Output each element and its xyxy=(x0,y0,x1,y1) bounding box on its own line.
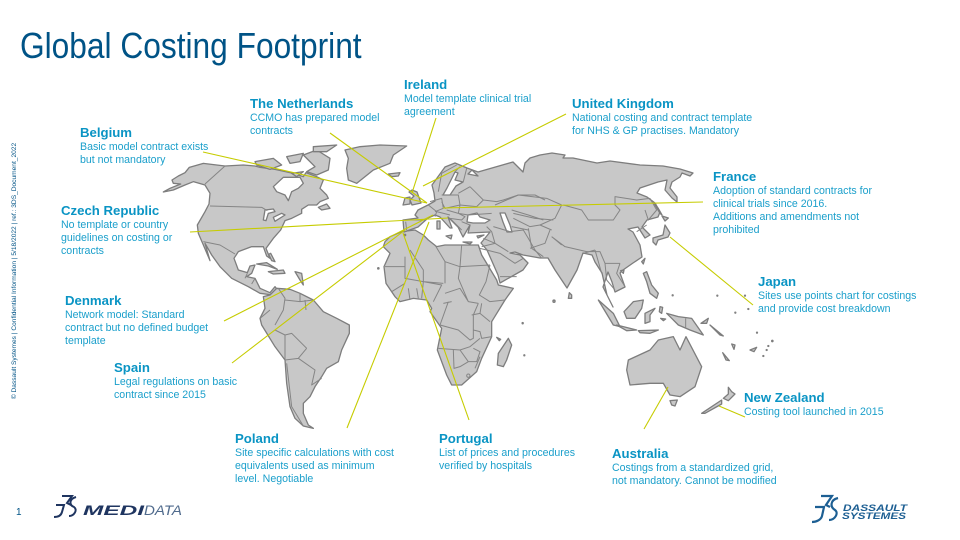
map: Europe and Asia borders xyxy=(406,165,657,290)
icon: 3DS mark xyxy=(812,496,838,522)
label: Spain: Legal regulations on basic xyxy=(114,376,237,388)
label: Spain: Spain xyxy=(114,360,150,375)
label: Portugal: List of prices and procedures xyxy=(439,447,575,459)
label: The Netherlands xyxy=(250,96,380,137)
map: North America and Greenland xyxy=(163,145,407,295)
label: Denmark: contract but no defined budget xyxy=(65,322,208,334)
leader: Japan xyxy=(670,237,753,305)
label: Australia: not mandatory. Cannot be modified xyxy=(612,475,777,487)
label: Denmark: Network model: Standard xyxy=(65,309,185,321)
label: United Kingdom: United Kingdom xyxy=(572,96,674,111)
label: Belgium xyxy=(80,125,208,166)
label: Denmark: Denmark xyxy=(65,293,121,308)
label: The Netherlands: CCMO has prepared model xyxy=(250,112,380,124)
label: Poland: equivalents used as minimum xyxy=(235,460,375,472)
leader: Poland xyxy=(347,222,429,428)
label: France: Adoption of standard contracts for xyxy=(713,185,872,197)
label: Denmark: template xyxy=(65,335,106,347)
leader: Portugal xyxy=(403,233,469,420)
label: Portugal: Portugal xyxy=(439,431,492,446)
label: Spain: contract since 2015 xyxy=(114,389,206,401)
label: Japan: Sites use points chart for costings xyxy=(758,290,916,302)
leader: The Netherlands xyxy=(330,133,427,203)
leader: Belgium xyxy=(203,152,427,203)
map: inland seas xyxy=(443,170,512,232)
logo: Dassault Systemes: SYSTEMES xyxy=(842,511,906,521)
leader: Ireland xyxy=(412,118,436,193)
label: France xyxy=(713,169,872,236)
label: Australia xyxy=(612,446,777,487)
map: East and Southeast Asia islands xyxy=(522,203,749,327)
map: Mediterranean islands xyxy=(437,221,484,244)
label: Australia: Costings from a standardized grid, xyxy=(612,462,773,474)
label: Ireland: Ireland xyxy=(404,77,447,92)
label: Ireland xyxy=(404,77,531,118)
label: New Zealand: Costing tool launched in 2015 xyxy=(744,406,884,418)
logo: Medidata xyxy=(54,496,182,518)
leader: Spain xyxy=(232,230,405,363)
label: Czech Republic: No template or country xyxy=(61,219,168,231)
logo: Medidata: DATA xyxy=(144,502,182,518)
label: United Kingdom xyxy=(572,96,752,137)
label: Japan: and provide cost breakdown xyxy=(758,303,891,315)
label: The Netherlands: The Netherlands xyxy=(250,96,353,111)
map: UK and Ireland xyxy=(403,190,421,205)
label: Czech Republic: contracts xyxy=(61,245,104,257)
label: Belgium: but not mandatory xyxy=(80,154,165,166)
label: The Netherlands: contracts xyxy=(250,125,293,137)
leader: United Kingdom xyxy=(423,114,566,186)
label: Ireland: agreement xyxy=(404,106,455,118)
map: South America xyxy=(260,288,349,428)
map: Africa xyxy=(378,230,555,385)
label: Poland: Site specific calculations with cost xyxy=(235,447,394,459)
label: Belgium: Belgium xyxy=(80,125,132,140)
label: United Kingdom: for NHS & GP practises. Mandatory xyxy=(572,125,739,137)
label: Belgium: Basic model contract exists xyxy=(80,141,208,153)
label: Czech Republic: guidelines on costing or xyxy=(61,232,172,244)
label: Portugal xyxy=(439,431,575,472)
logo: Dassault Systemes xyxy=(812,496,909,522)
label: Japan: Japan xyxy=(758,274,796,289)
map: Oceania and Indonesia xyxy=(617,300,773,413)
map: Eurasia xyxy=(403,153,693,307)
vertical confidentiality note: © Dassault Systemes | Confidential Information | 5/18/2022 | ref.: 3DS_Document_2022 xyxy=(11,143,18,399)
logo: Dassault Systemes: DASSAULT xyxy=(843,503,909,513)
label: Czech Republic: Czech Republic xyxy=(61,203,159,218)
icon: 3DS mark xyxy=(54,496,76,517)
label: France: France xyxy=(713,169,756,184)
label: Portugal: verified by hospitals xyxy=(439,460,532,472)
leader: New Zealand xyxy=(719,406,745,417)
leader: France xyxy=(443,202,703,208)
label: France: Additions and amendments not xyxy=(713,211,859,223)
leader: Czech Republic xyxy=(190,218,448,232)
label: United Kingdom: National costing and contract template xyxy=(572,112,752,124)
leader lines xyxy=(190,114,753,429)
label: Australia: Australia xyxy=(612,446,668,461)
label: Poland: Poland xyxy=(235,431,279,446)
leader: Australia xyxy=(644,387,668,429)
label: Czech Republic xyxy=(61,203,172,257)
label: New Zealand: New Zealand xyxy=(744,390,825,405)
label: Spain xyxy=(114,360,237,401)
label: France: prohibited xyxy=(713,224,760,236)
title: Global Costing Footprint xyxy=(20,25,362,66)
page number: 1 xyxy=(16,507,22,518)
label: New Zealand xyxy=(744,390,884,418)
label: Poland xyxy=(235,431,394,485)
logo: Medidata: MEDI xyxy=(83,502,146,518)
label: France: clinical trials since 2016. xyxy=(713,198,827,210)
label: Japan xyxy=(758,274,916,315)
label: Denmark xyxy=(65,293,208,347)
label: Poland: level. Negotiable xyxy=(235,473,313,485)
label: Ireland: Model template clinical trial xyxy=(404,93,531,105)
leader: Denmark xyxy=(224,215,433,321)
